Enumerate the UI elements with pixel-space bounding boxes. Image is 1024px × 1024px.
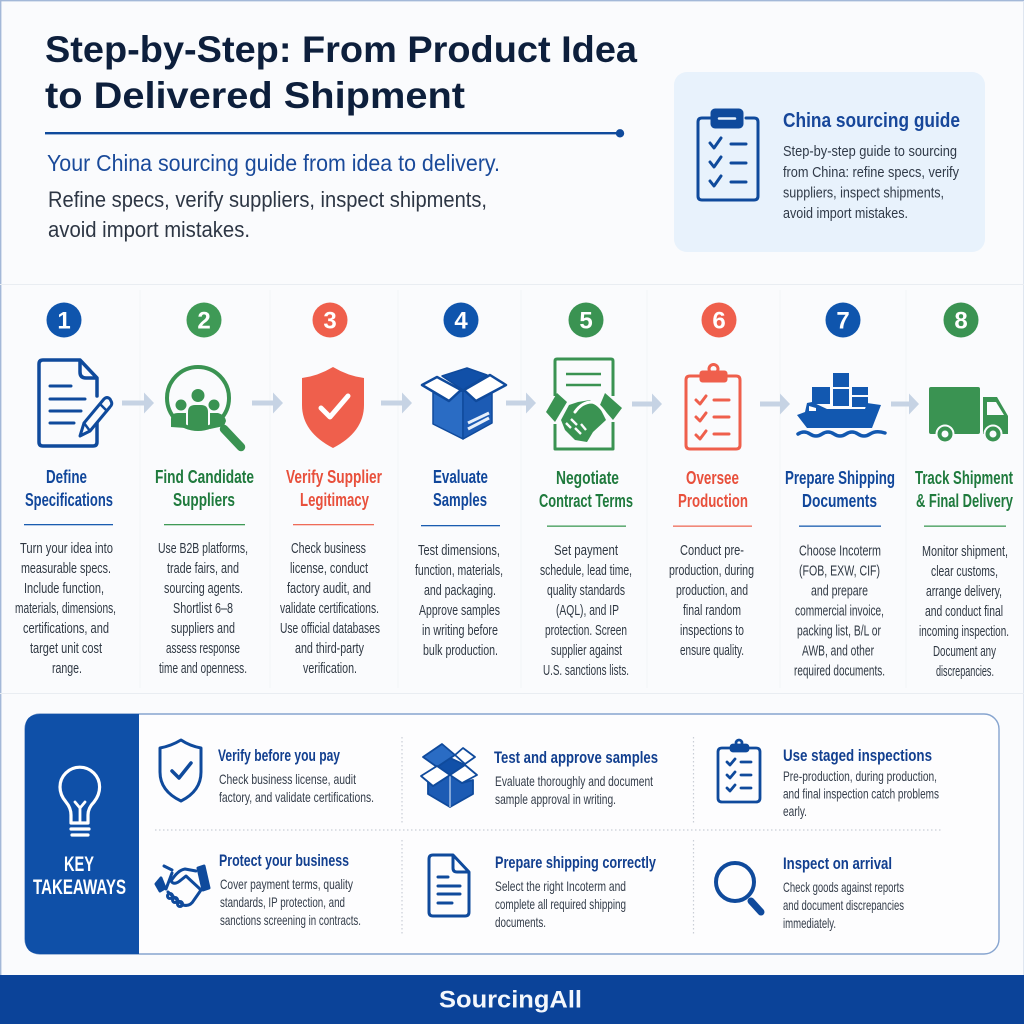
step description: Turn your idea into [20, 541, 113, 557]
takeaway text: complete all required shipping [495, 896, 626, 912]
step description: factory audit, and [287, 581, 371, 597]
step title [915, 467, 1013, 511]
takeaway text [783, 879, 904, 931]
step description: commercial invoice, [795, 604, 884, 620]
takeaway: test and approve samples [421, 744, 658, 807]
step description: AWB, and other [802, 644, 874, 660]
panel: step 3 [280, 302, 382, 677]
panel: step 2 [155, 302, 254, 677]
step description: certifications, and [23, 621, 109, 637]
step title: Verify Supplier [286, 466, 382, 487]
arrow 3 to 4 [381, 392, 412, 414]
step title: Legitimacy [300, 489, 370, 510]
takeaway text: sanctions screening in contracts. [220, 912, 361, 928]
icon: contract and handshake [546, 359, 622, 449]
step description: packing list, B/L or [797, 624, 881, 640]
step title [539, 467, 633, 511]
step description: measurable specs. [21, 561, 111, 577]
step description: final random [683, 603, 741, 619]
subtitle: Your China sourcing guide from idea to delivery. [47, 150, 500, 176]
step description: trade fairs, and [167, 561, 239, 577]
title rule with dot [45, 129, 624, 138]
sidebar label [33, 853, 126, 899]
step number 6 [702, 302, 736, 338]
panel: step 5 [539, 302, 633, 679]
icon: open box [421, 744, 477, 807]
step description: license, conduct [290, 561, 368, 577]
icon: cargo ship [797, 373, 885, 436]
card text: Step-by-step guide to sourcing [783, 143, 957, 160]
step description: materials, dimensions, [15, 601, 116, 617]
step number 7: 7 [836, 308, 850, 334]
takeaway text: Pre-production, during production, [783, 768, 937, 784]
step description: Conduct pre- [680, 543, 744, 559]
intro text: avoid import mistakes. [48, 217, 250, 242]
step description: inspections to [680, 623, 744, 639]
takeaway text: Evaluate thoroughly and document [495, 773, 653, 789]
step description: target unit cost [30, 641, 102, 657]
step number 3 [312, 302, 348, 338]
step title [433, 466, 488, 510]
step description: Shortlist 6–8 [173, 601, 233, 617]
step description: Test dimensions, [418, 543, 500, 559]
step description: Set payment [554, 543, 618, 559]
card text: suppliers, inspect shipments, [783, 184, 944, 202]
icon: magnifier [716, 863, 761, 912]
icon: document and pencil [39, 360, 112, 446]
takeaway: prepare shipping correctly [429, 853, 656, 930]
step title [25, 466, 113, 510]
takeaway text: Check goods against reports [783, 879, 904, 895]
step number 1: 1 [57, 308, 71, 334]
arrow 6 to 7 [760, 394, 790, 414]
panel: key takeaways [25, 714, 999, 954]
takeaway text [495, 878, 626, 930]
takeaway: verify before you pay: Verify before you pay [218, 746, 340, 765]
takeaway text [495, 773, 653, 807]
takeaway: protect your business [156, 851, 361, 928]
step description: function, materials, [415, 563, 503, 579]
step title: Suppliers [173, 489, 235, 510]
step description [158, 541, 248, 677]
step number 4: 4 [454, 308, 468, 334]
icon: handshake outline [156, 866, 209, 906]
takeaway: verify before you pay [160, 740, 374, 805]
step description: production, during [669, 563, 754, 579]
icon: magnifier with people [167, 367, 241, 447]
step description: Use official databases [280, 621, 380, 637]
footer band: SourcingAll [439, 986, 582, 1014]
sidebar label: TAKEAWAYS [33, 876, 126, 899]
step description: and third-party [295, 641, 364, 657]
intro text [48, 187, 487, 242]
footer band [0, 975, 1024, 1024]
step description [280, 541, 380, 677]
step title: Documents [802, 490, 877, 511]
panel: step 1 [15, 302, 116, 677]
takeaway: protect your business: Protect your business [219, 851, 349, 870]
step title: Evaluate [433, 466, 488, 487]
takeaway text: factory, and validate certifications. [219, 789, 374, 805]
step description: Include function, [24, 581, 104, 597]
icon: clipboard checklist [698, 110, 758, 200]
step description: sourcing agents. [164, 581, 243, 597]
arrow 4 to 5 [506, 392, 536, 414]
step description: range. [52, 661, 82, 677]
card text [783, 143, 959, 222]
takeaway text: standards, IP protection, and [220, 894, 345, 910]
step number 8: 8 [954, 308, 968, 334]
step number 2: 2 [197, 308, 211, 334]
takeaway text: immediately. [783, 915, 836, 931]
icon: light bulb [60, 767, 100, 835]
step title [155, 466, 254, 510]
takeaway text [783, 768, 939, 819]
takeaway text: and document discrepancies [783, 897, 904, 913]
step title [286, 466, 382, 510]
step title: Production [678, 490, 748, 511]
step description: verification. [303, 661, 357, 677]
step description [15, 541, 116, 677]
takeaway: test and approve samples: Test and approve samples [494, 748, 658, 767]
step description: required documents. [794, 664, 885, 680]
takeaway text [219, 771, 374, 805]
step description: validate certifications. [280, 601, 379, 617]
step description: Choose Incoterm [799, 544, 881, 560]
icon: red checklist [686, 364, 740, 449]
takeaway text: Check business license, audit [219, 771, 356, 787]
step title: Samples [433, 489, 487, 510]
step number 2 [186, 302, 222, 338]
card text: from China: refine specs, verify [783, 164, 959, 181]
icon: clipboard [718, 740, 760, 802]
step description: suppliers and [171, 621, 235, 637]
panel: step 7 [785, 302, 895, 680]
sidebar label: KEY [64, 853, 94, 876]
step number 1 [46, 302, 82, 338]
step number 7 [826, 302, 860, 338]
takeaway text: sample approval in writing. [495, 791, 616, 807]
icon: shield check [302, 367, 364, 448]
step title: Negotiate [556, 467, 619, 488]
step title: Define [46, 466, 87, 487]
takeaway text: Cover payment terms, quality [220, 876, 353, 892]
step description: supplier against [551, 643, 622, 659]
takeaway text: early. [783, 803, 807, 819]
panel: step 4 [415, 302, 506, 659]
step description: Check business [291, 541, 366, 557]
step title: Specifications [25, 489, 113, 510]
card text: avoid import mistakes. [783, 205, 908, 222]
step description: clear customs, [931, 564, 998, 580]
step number 6: 6 [712, 308, 726, 334]
step description: U.S. sanctions lists. [543, 663, 629, 679]
step description [919, 544, 1009, 680]
icon: delivery truck [929, 387, 1008, 442]
step number 4 [444, 302, 478, 338]
step description: ensure quality. [680, 643, 744, 659]
step title: Oversee [686, 467, 739, 488]
panel: step 8 [915, 302, 1013, 680]
title: Step-by-Step: From Product Idea [45, 28, 638, 70]
step number 3: 3 [323, 308, 337, 334]
step title: Find Candidate [155, 466, 254, 487]
step description: Use B2B platforms, [158, 541, 248, 557]
card heading: China sourcing guide [783, 110, 960, 132]
takeaway: use staged inspections [718, 740, 939, 819]
icon: shield outline [160, 740, 201, 801]
step description: and prepare [811, 584, 868, 600]
step description: quality standards [547, 583, 625, 599]
step description: and packaging. [424, 583, 496, 599]
panel: China sourcing guide [674, 72, 985, 252]
step description [540, 543, 632, 679]
arrow 1 to 2 [122, 392, 154, 414]
step description: in writing before [422, 623, 498, 639]
step title: Contract Terms [539, 490, 633, 511]
step title: Prepare Shipping [785, 467, 895, 488]
step description: (AQL), and IP [556, 603, 619, 619]
step number 5: 5 [579, 308, 593, 334]
title: to Delivered Shipment [45, 74, 466, 116]
step title [785, 467, 895, 511]
takeaway text [220, 876, 361, 928]
takeaway: inspect on arrival [716, 854, 904, 931]
takeaway: inspect on arrival: Inspect on arrival [783, 854, 892, 873]
step description: assess response [166, 641, 240, 657]
step description [794, 544, 885, 680]
step number 8 [944, 302, 978, 338]
icon: document [429, 855, 469, 916]
title [45, 28, 638, 116]
step description: bulk production. [423, 643, 498, 659]
step description [415, 543, 503, 659]
step number 5 [568, 302, 604, 338]
step title [678, 467, 748, 511]
takeaway: prepare shipping correctly: Prepare shipping correctly [495, 853, 656, 872]
takeaway text: documents. [495, 914, 546, 930]
takeaway: use staged inspections: Use staged inspections [783, 746, 932, 765]
key takeaways sidebar [25, 714, 139, 954]
arrow 5 to 6 [632, 394, 662, 414]
icon: open box [422, 368, 506, 439]
arrow 2 to 3 [252, 392, 283, 414]
step description: schedule, lead time, [540, 563, 632, 579]
takeaway text: and final inspection catch problems [783, 786, 939, 802]
step description: (FOB, EXW, CIF) [799, 564, 880, 580]
step description: time and openness. [159, 661, 247, 677]
step description: Approve samples [419, 603, 500, 619]
panel: step 6 [669, 302, 754, 659]
arrow 7 to 8 [891, 394, 919, 414]
step description: production, and [676, 583, 748, 599]
intro text: Refine specs, verify suppliers, inspect shipments, [48, 187, 487, 212]
step description: protection. Screen [545, 623, 627, 639]
step description [669, 543, 754, 659]
takeaway text: Select the right Incoterm and [495, 878, 626, 894]
